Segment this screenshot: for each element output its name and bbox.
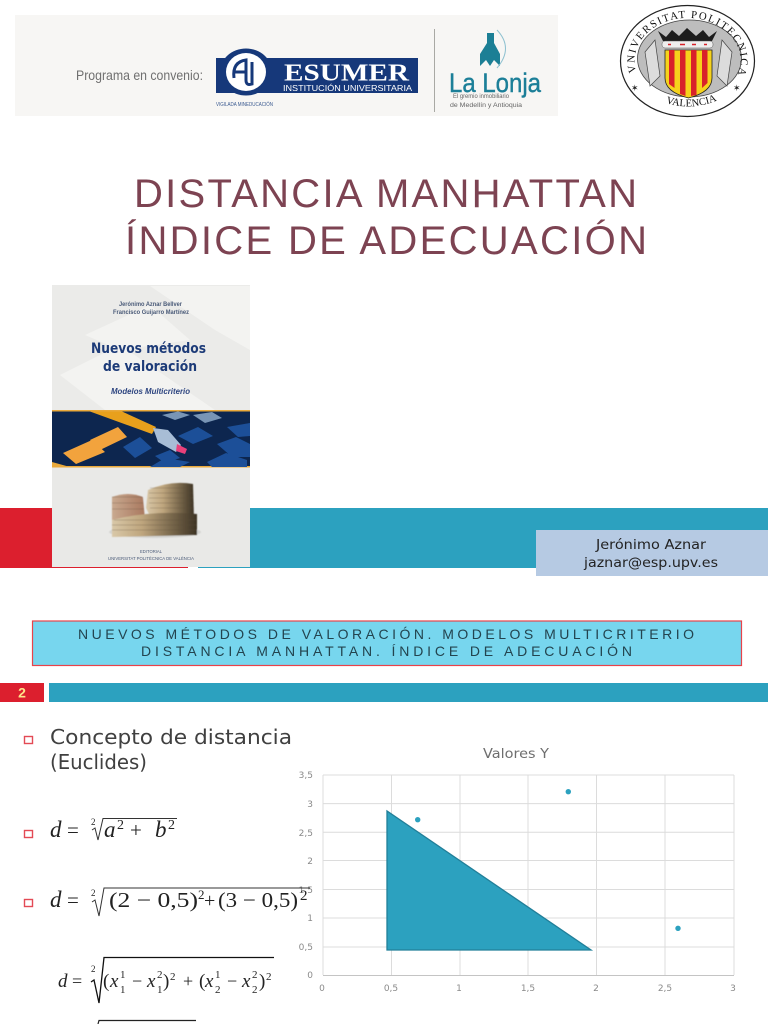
decorative cover band: teal — [198, 508, 768, 568]
formula: coordinates: + — [183, 971, 193, 991]
formula: general root — [24, 817, 177, 842]
book cover: UNIVERSITAT POLITÈCNICA DE VALÈNCIA — [108, 555, 194, 561]
formula: general root: 2 — [91, 817, 96, 827]
partner logos banner — [15, 15, 558, 116]
book cover: Francisco Guijarro Martínez — [113, 309, 190, 316]
logo: La Lonja: La Lonja — [449, 68, 542, 98]
formula: coordinates: − — [227, 971, 237, 991]
book authors: Jerónimo Aznar Bellver — [119, 301, 182, 308]
formula: numeric example: d — [50, 887, 62, 912]
chart title: Valores Y — [483, 746, 550, 762]
formula: numeric example: (3 − 0,5) — [218, 888, 298, 912]
formula: numeric example: (2 − 0,5) — [109, 888, 198, 912]
author box: Jerónimo Aznar — [595, 537, 706, 553]
slide number tab: 2 — [18, 684, 26, 700]
x axis labels: 1 — [456, 984, 462, 994]
chart: Valores Y scatter — [299, 746, 736, 994]
formula: general root: 2 — [168, 818, 175, 833]
formula: cut-off root at page bottom — [98, 1020, 196, 1024]
seal crown — [658, 28, 717, 41]
x axis labels — [319, 984, 736, 994]
formula: general root: b — [155, 817, 166, 842]
formula: coordinates: 2 — [91, 964, 96, 974]
author box — [536, 530, 768, 576]
seal side scrolls — [645, 40, 732, 86]
formula: coordinates: = — [72, 971, 82, 991]
formula: numeric example: 2 — [91, 888, 96, 898]
formula: coordinates: 2 — [215, 984, 220, 996]
book cover — [52, 285, 250, 567]
slide heading box: NUEVOS MÉTODOS DE VALORACIÓN. MODELOS MULTICRITERIO — [78, 626, 694, 642]
slide number tab — [0, 683, 44, 702]
logo: Universitat Politècnica de València seal: VALENCIA — [668, 95, 717, 106]
formula: coordinates: 1 — [157, 984, 162, 996]
logo: La Lonja: de Medellín y Antioquia — [450, 102, 522, 109]
logo: ESUMER — [216, 48, 418, 108]
slide heading box — [32, 621, 742, 666]
formula: coordinates: 1 — [120, 969, 126, 981]
formula: coordinates: ( — [199, 971, 205, 992]
bullet text: concept of distance — [24, 725, 292, 774]
book subtitle: Modelos Multicriterio — [111, 386, 190, 396]
x axis labels: 0 — [319, 984, 325, 994]
logo: ESUMER: INSTITUCIÓN UNIVERSITARIA — [283, 83, 412, 93]
y axis labels: 3,5 — [299, 771, 313, 781]
book coins image — [109, 483, 201, 538]
logo: La Lonja — [449, 30, 542, 109]
bullet text: concept of distance: (Euclides) — [50, 750, 147, 774]
formula: numeric example: + — [204, 890, 215, 912]
formula: coordinates: 1 — [120, 984, 126, 996]
title: DISTANCIA MANHATTAN — [134, 172, 637, 216]
formula: coordinates: x — [109, 971, 119, 992]
y axis labels: 0 — [307, 971, 313, 981]
logo: Universitat Politècnica de València seal: ✶ — [631, 83, 639, 93]
formula: coordinates: ( — [103, 971, 109, 992]
formula: coordinates: d — [58, 971, 68, 992]
x axis labels: 2,5 — [658, 984, 672, 994]
formula: coordinates: ) — [259, 971, 265, 992]
formula: general root: a — [104, 817, 116, 842]
slide header bar — [49, 683, 768, 702]
book calculator image — [52, 410, 250, 468]
programme label: Programa en convenio: — [76, 67, 203, 83]
formula: coordinates: ) — [163, 971, 169, 992]
y axis labels: 0,5 — [299, 943, 313, 953]
logo: ESUMER: VIGILADA MINEDUCACIÓN — [216, 101, 273, 108]
logo: Universitat Politècnica de València seal: VNIVERSITAT POLITECNICA — [627, 10, 748, 74]
formula: general root: = — [67, 818, 79, 842]
formula: numeric example: 2 — [198, 887, 204, 902]
book publisher: EDITORIAL — [140, 549, 162, 554]
book title: Nuevos métodos — [91, 341, 206, 357]
logo: La Lonja: El gremio inmobiliario — [453, 93, 509, 100]
formula: general root: d — [50, 817, 62, 842]
formula: coordinates: 1 — [215, 969, 220, 981]
y axis labels: 2 — [307, 857, 313, 867]
x axis labels: 3 — [730, 984, 736, 994]
y axis labels: 3 — [307, 800, 313, 810]
slide heading box: DISTANCIA MANHATTAN. ÍNDICE DE ADECUACIÓN — [141, 643, 632, 659]
formula: coordinates: 2 — [252, 969, 258, 981]
triangle — [387, 811, 591, 950]
formula: numeric example: 2 — [300, 888, 308, 904]
bullet text: concept of distance: Concepto de distancia — [50, 725, 292, 749]
book cover: de valoración — [103, 359, 197, 375]
formula: numeric example — [24, 887, 310, 916]
formula: coordinates: x — [204, 971, 214, 992]
formula: general root: 2 — [117, 818, 124, 833]
formula: coordinates: x — [241, 971, 251, 992]
title — [125, 172, 647, 263]
y axis labels — [299, 771, 313, 981]
formula: numeric example: = — [67, 888, 79, 912]
y axis labels: 1 — [307, 914, 313, 924]
formula: coordinates — [58, 958, 274, 1003]
formula: coordinates: 2 — [157, 969, 162, 981]
formula: coordinates: 2 — [266, 971, 272, 983]
data points — [415, 789, 681, 931]
title: ÍNDICE DE ADECUACIÓN — [125, 218, 647, 263]
y axis labels: 2,5 — [299, 829, 313, 839]
x axis labels: 0,5 — [384, 984, 398, 994]
logo: Universitat Politècnica de València seal — [620, 4, 756, 118]
y axis labels: 1,5 — [299, 886, 313, 896]
formula: coordinates: 2 — [252, 984, 258, 996]
formula: coordinates: 2 — [170, 971, 176, 983]
formula: general root: + — [130, 818, 142, 842]
logo: ESUMER: ESUMER — [284, 60, 409, 86]
seal shield — [665, 50, 712, 98]
decorative cover band: red — [0, 508, 188, 568]
formula: coordinates: − — [132, 971, 142, 991]
author box: jaznar@esp.upv.es — [583, 555, 718, 571]
x axis labels: 2 — [593, 984, 599, 994]
logo: Universitat Politècnica de València seal: ✶ — [733, 83, 741, 93]
x axis labels: 1,5 — [521, 984, 535, 994]
formula: coordinates: x — [146, 971, 156, 992]
